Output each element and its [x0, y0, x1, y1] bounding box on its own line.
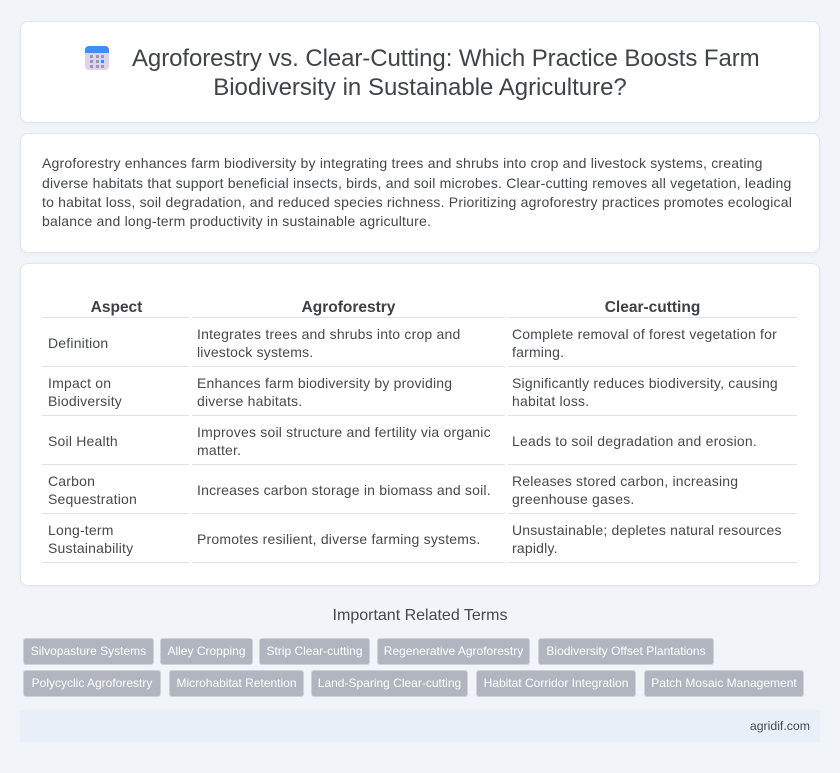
tags: related terms: Biodiversity Offset Plantations: [546, 644, 706, 658]
title: Agroforestry vs. Clear-Cutting: Which Practice Boosts Farm: [132, 45, 760, 72]
row: soil health: Leads to soil degradation and erosion.: [512, 433, 757, 449]
row: impact on biodiversity: Enhances farm biodiversity by providing: [197, 375, 452, 391]
row: definition: Definition: [48, 335, 108, 351]
row: long-term sustainability: [48, 522, 782, 556]
row: definition: [48, 326, 777, 360]
row: long-term sustainability: rapidly.: [512, 540, 558, 556]
row: soil health: Improves soil structure and fertility via organic: [197, 424, 491, 440]
text block: summary: balance and long-term productivity in sustainable agriculture.: [42, 213, 431, 229]
tags: related terms: Polycyclic Agroforestry: [32, 676, 152, 690]
row: soil health: matter.: [197, 442, 241, 458]
row: impact on biodiversity: [48, 375, 778, 409]
row: soil health: [48, 424, 757, 458]
row: soil health: Soil Health: [48, 433, 118, 449]
title: [132, 45, 760, 101]
row: long-term sustainability: Sustainability: [48, 540, 133, 556]
table header: Aspect: [91, 299, 142, 316]
row: definition: livestock systems.: [197, 344, 313, 360]
row: impact on biodiversity: Impact on: [48, 375, 111, 391]
footer bar: [20, 710, 820, 742]
row: carbon sequestration: Sequestration: [48, 491, 137, 507]
row: carbon sequestration: greenhouse gases.: [512, 491, 634, 507]
tags: related terms: Alley Cropping: [167, 644, 246, 658]
row: long-term sustainability: Unsustainable; depletes natural resources: [512, 522, 782, 538]
text block: summary: [42, 155, 792, 229]
row: long-term sustainability: Long-term: [48, 522, 114, 538]
row: impact on biodiversity: Significantly reduces biodiversity, causing: [512, 375, 778, 391]
row: carbon sequestration: Releases stored carbon, increasing: [512, 473, 738, 489]
row: impact on biodiversity: diverse habitats.: [197, 393, 302, 409]
row: impact on biodiversity: habitat loss.: [512, 393, 589, 409]
text block: summary: Agroforestry enhances farm biodiversity by integrating trees and shrubs into crop and livestock systems, creating: [42, 155, 763, 171]
row: carbon sequestration: [48, 473, 738, 507]
row: definition: farming.: [512, 344, 564, 360]
tags: related terms: Regenerative Agroforestry: [384, 644, 523, 658]
panel: comparison table card: [20, 263, 820, 586]
tags: related terms: Silvopasture Systems: [31, 644, 146, 658]
table header: Agroforestry: [302, 299, 395, 316]
tags: related terms: Microhabitat Retention: [176, 676, 297, 690]
row: impact on biodiversity: Biodiversity: [48, 393, 122, 409]
tags: related terms: Land-Sparing Clear-cutting: [318, 676, 461, 690]
icon: calendar: [85, 46, 109, 70]
row: definition: Integrates trees and shrubs into crop and: [197, 326, 460, 342]
comparison table: [42, 299, 797, 563]
table header: [91, 299, 700, 316]
footer site name: agridif.com: [750, 719, 810, 733]
heading: important related terms: Important Related Terms: [333, 607, 507, 624]
tags: related terms: Patch Mosaic Management: [651, 676, 797, 690]
row: long-term sustainability: Promotes resilient, diverse farming systems.: [197, 531, 480, 547]
tags: related terms: Strip Clear-cutting: [266, 644, 363, 658]
tags: related terms: Habitat Corridor Integration: [484, 676, 628, 690]
panel: title card: [20, 21, 820, 123]
text block: summary: diverse habitats that support beneficial insects, birds, and soil microbes. Clear-cutting removes all vegetation, leading: [42, 175, 791, 191]
row: definition: Complete removal of forest vegetation for: [512, 326, 777, 342]
row: carbon sequestration: Carbon: [48, 473, 95, 489]
table header: Clear-cutting: [605, 299, 700, 316]
text block: summary: to habitat loss, soil degradation, and reduced species richness. Prioritizing agroforestry practices promotes ecological: [42, 194, 792, 210]
panel: summary card: [20, 133, 820, 253]
tags: related terms: [23, 638, 804, 697]
row: carbon sequestration: Increases carbon storage in biomass and soil.: [197, 482, 491, 498]
title: Biodiversity in Sustainable Agriculture?: [213, 74, 627, 101]
